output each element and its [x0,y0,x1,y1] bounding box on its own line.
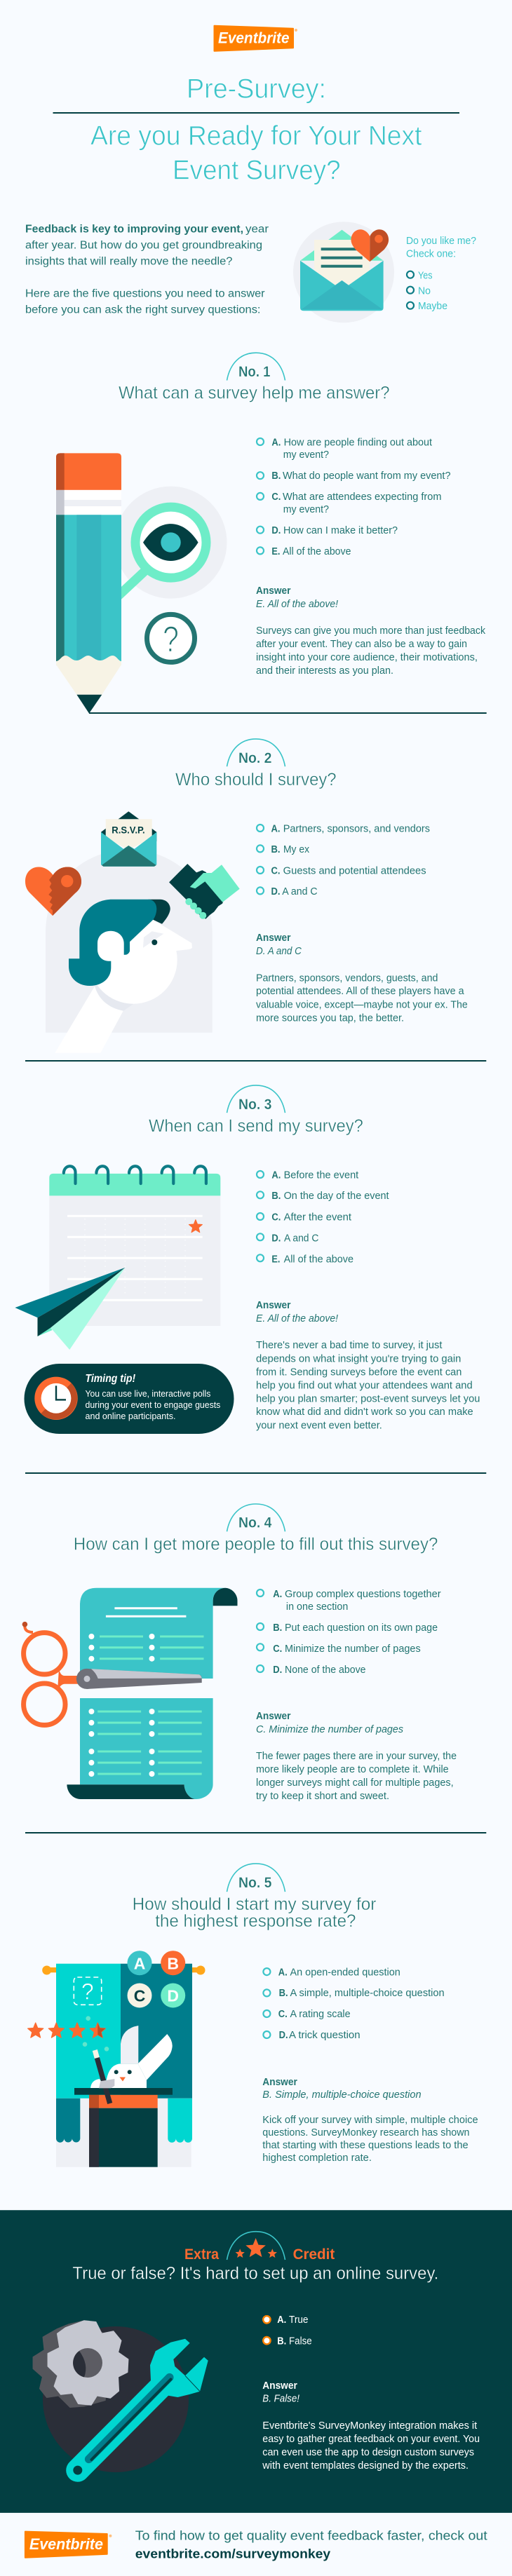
options: question 4: None of the above [285,1665,366,1676]
answer: extra credit: Eventbrite's SurveyMonkey integration makes it [262,2420,478,2432]
answer: question 1: insight into your core audience, their motivations, [256,651,478,663]
answer: question 4: The fewer pages there are in your survey, the [256,1750,457,1762]
options: question 5: A simple, multiple-choice question [290,1988,445,1999]
panel: question 1 [56,353,487,714]
answer: question 1 [256,585,485,677]
call to action: eventbrite.com/surveymonkey [135,2547,331,2561]
answer: question 2 [256,932,468,1024]
icon: scissors [22,1622,202,1725]
answer: question 3 [256,1299,480,1432]
answer: question 3: There's never a bad time to survey, it just [256,1339,443,1351]
answer: extra credit [262,2380,480,2472]
options: question 2: Guests and potential attendees [283,865,426,876]
heading: No. 5: No. 5 [238,1874,272,1891]
intro text: year [245,224,269,236]
options: question 1: What do people want from my event? [283,470,450,482]
logo: Eventbrite footer [25,2532,112,2558]
heading: No. 5: the highest response rate? [155,1911,356,1931]
options: question 1: C. [271,492,281,503]
heading: No. 3: No. 3 [238,1096,272,1113]
options: question 1: my event? [283,449,329,461]
answer: extra credit: can even use the app to design custom surveys [262,2446,474,2458]
heading: No. 1 [119,353,390,403]
panel: question 4 [22,1504,457,1802]
answer: question 3: from it. Sending surveys before the event can [256,1366,462,1378]
options: question 3: Before the event [284,1170,358,1181]
heading: No. 5: How should I start my survey for [133,1894,376,1914]
panel: question 5 [28,1864,478,2167]
answer: question 5: B. Simple, multiple-choice question [262,2089,422,2101]
heading: No. 3 [149,1085,363,1136]
illustration: survey scroll [67,1588,238,1799]
panel: question 2 [25,739,468,1053]
answer: question 3: help you plan smarter; post-event surveys let you [256,1392,480,1404]
options: extra credit: False [289,2336,312,2347]
options: question 2: My ex [283,844,310,855]
options: question 4: Put each question on its own page [285,1622,438,1634]
options: question 1: All of the above [283,546,351,557]
answer: question 4 [256,1710,457,1802]
heading: No. 2 [175,739,337,789]
answer: question 5: that starting with these questions leads to the [262,2139,469,2151]
callout: timing tip [24,1364,234,1434]
heading: No. 2: No. 2 [238,750,272,766]
answer: question 4: try to keep it short and sweet. [256,1790,389,1802]
heading: extra credit: True or false? It's hard to set up an online survey. [72,2264,438,2284]
panel: question 3 [15,1085,480,1434]
answer: extra credit: with event templates designed by the experts. [262,2460,469,2472]
answer: extra credit: Answer [262,2380,297,2392]
options: question 3: A. [271,1170,281,1181]
heading: No. 5 [133,1864,376,1931]
heading: No. 3: When can I send my survey? [149,1116,363,1136]
options: question 4: C. [273,1643,282,1655]
answer: question 3: know what did and didn't work so you can make [256,1406,473,1418]
options: question 3: On the day of the event [284,1191,389,1202]
options: extra credit: True [289,2314,309,2326]
illustration: magnifier and question [108,487,227,662]
person [55,900,192,1053]
heading: No. 4: How can I get more people to fill out this survey? [74,1535,438,1554]
answer: question 5: Kick off your survey with simple, multiple choice [262,2114,478,2126]
answer: question 1: after your event. They can also be a way to gain [256,638,467,650]
footer [25,2528,487,2561]
answer: question 4: C. Minimize the number of pages [256,1723,403,1735]
icon: RSVP envelope [101,811,156,867]
options: question 2: Partners, sponsors, and vendors [283,823,430,834]
check one poll: No [418,285,431,297]
gear [33,2321,128,2407]
heading: No. 1: No. 1 [238,363,271,380]
answer bubbles: A [134,1954,145,1972]
logo: Eventbrite footer: Eventbrite [29,2535,103,2553]
answer: question 5 [262,2076,478,2164]
header panel [25,26,476,323]
rabbit [90,2026,173,2088]
top hat [74,2088,173,2167]
rating stars [28,2023,105,2038]
wrench [73,2339,208,2475]
answer bubbles: B [167,1954,179,1972]
dashed question box [74,1977,102,2005]
icon: envelope with heart [293,222,394,323]
answer: question 1: E. All of the above! [256,598,339,610]
heading: extra credit [72,2232,438,2284]
heading: extra credit: Extra [184,2246,220,2263]
options: question 4: Minimize the number of pages [285,1643,421,1655]
heading: No. 4 [74,1504,438,1554]
options: question 1: How are people finding out about [284,437,432,448]
answer: question 2: potential attendees. All of these players have a [256,985,464,997]
answer: question 2: D. A and C [256,945,302,957]
check one poll: Maybe [418,301,447,312]
callout: timing tip: and online participants. [86,1411,175,1421]
panel: extra credit [0,2210,512,2513]
answer: question 2: Partners, sponsors, vendors, guests, and [256,972,438,984]
intro text: before you can ask the right survey questions: [25,304,261,316]
options: question 5 [263,1967,445,2041]
options: question 5: C. [278,2009,288,2020]
options: question 5: B. [279,1988,288,1999]
heading: No. 2: Who should I survey? [175,770,337,789]
intro text: after year. But how do you get groundbreaking [25,240,262,252]
answer: extra credit: easy to gather great feedback on your event. You [262,2433,480,2445]
answer: question 4: Answer [256,1710,291,1722]
options: question 4: B. [273,1622,282,1634]
options: question 3: All of the above [284,1254,353,1265]
options: question 5: A rating scale [290,2009,351,2020]
answer: question 3: E. All of the above! [256,1313,339,1324]
intro text: Here are the five questions you need to answer [25,288,265,300]
options: question 3: After the event [284,1212,351,1223]
options: question 3: E. [271,1254,280,1265]
title: Are you Ready for Your Next [90,121,422,151]
heading: extra credit: Credit [293,2246,335,2263]
intro text [25,224,269,316]
options: extra credit: A. [277,2314,286,2326]
answer: question 2: more sources you tap, the better. [256,1012,404,1024]
heading: No. 1: What can a survey help me answer? [119,384,390,403]
title [53,74,459,186]
check one poll: Yes [418,270,432,281]
illustration: person with ideas [25,811,240,1053]
check one poll: Do you like me? [406,236,476,247]
title: Event Survey? [173,156,341,186]
answer: question 1: Surveys can give you much more than just feedback [256,625,485,637]
answer: question 5: Answer [262,2076,297,2088]
icon: handshake [170,865,240,919]
options: question 3: D. [271,1233,281,1244]
options: question 4: A. [273,1589,282,1600]
options: question 2: A and C [282,886,318,897]
answer: question 5: questions. SurveyMonkey research has shown [262,2127,470,2138]
answer: question 5: highest completion rate. [262,2152,372,2164]
answer: question 3: depends on what insight you're trying to gain [256,1353,461,1364]
title: Pre-Survey: [187,74,326,104]
call to action [135,2528,487,2561]
callout: timing tip: You can use live, interactive polls [86,1388,211,1399]
options: question 4: Group complex questions together [285,1589,441,1600]
answer: question 1: Answer [256,585,291,597]
intro text: Feedback is key to improving your event, [25,224,243,236]
options: question 5: An open-ended question [290,1967,400,1978]
logo: Eventbrite [215,26,297,51]
options: question 1: E. [271,546,280,557]
logo: Eventbrite: Eventbrite [218,29,289,47]
options: question 1: How can I make it better? [283,525,398,536]
illustration: calendar [49,1166,220,1326]
illustration: gear and wrench [33,2321,208,2475]
icon: paper plane [15,1268,125,1350]
answer bubbles: D [167,1987,179,2005]
options: question 4: in one section [286,1601,348,1613]
options: question 4 [257,1589,441,1676]
options: question 2: B. [271,844,281,855]
check one poll [406,236,476,312]
icon: clock [34,1377,78,1420]
answer bubbles: C [134,1987,145,2005]
options: extra credit [263,2314,312,2347]
illustration: magic show [28,1951,206,2167]
answer: question 2: valuable voice, except—maybe not your ex. The [256,998,468,1011]
check one poll: Check one: [406,249,456,260]
options: question 1: my event? [283,504,329,515]
options: question 3: A and C [284,1233,318,1244]
magic wand [95,2050,114,2103]
options: question 1: B. [271,470,281,482]
options: question 3: B. [271,1191,281,1202]
options: question 5: A. [278,1967,288,1978]
answer: question 3: Answer [256,1299,291,1311]
heading: No. 4: No. 4 [238,1514,272,1531]
answer: question 3: help you find out what your attendees want and [256,1379,473,1391]
options: extra credit: B. [277,2336,286,2347]
intro text: insights that will really move the needle? [25,256,233,268]
options: question 2: D. [271,886,281,897]
options: question 5: A trick question [289,2030,361,2041]
callout: timing tip: Timing tip! [86,1373,136,1385]
call to action: To find how to get quality event feedback faster, check out [135,2528,487,2543]
options: question 2 [257,823,430,897]
answer: question 2: Answer [256,932,291,944]
options: question 1: What are attendees expecting from [283,492,442,503]
options: question 3 [257,1170,389,1265]
callout: timing tip: during your event to engage guests [86,1399,221,1410]
dashed question box: ? [81,1979,94,2005]
options: question 1 [257,437,450,557]
options: question 4: D. [273,1665,282,1676]
options: question 2: C. [271,865,281,876]
answer: question 3: your next event even better. [256,1419,382,1432]
options: question 1: D. [271,525,281,536]
icon: broken heart [25,867,81,916]
answer: question 4: more likely people are to complete it. While [256,1763,449,1775]
options: question 2: A. [271,823,281,834]
illustration: pencil [56,453,487,714]
answer bubbles [128,1951,185,2008]
icon: RSVP envelope: R.S.V.P. [112,824,145,835]
options: question 5: D. [279,2030,288,2041]
options: question 1: A. [271,437,281,448]
answer: question 4: longer surveys might call for multiple pages, [256,1777,454,1789]
answer: extra credit: B. False! [262,2393,300,2405]
options: question 3: C. [271,1212,281,1223]
illustration: magnifier and question: ? [163,619,179,660]
answer: question 1: and their interests as you plan. [256,665,393,677]
